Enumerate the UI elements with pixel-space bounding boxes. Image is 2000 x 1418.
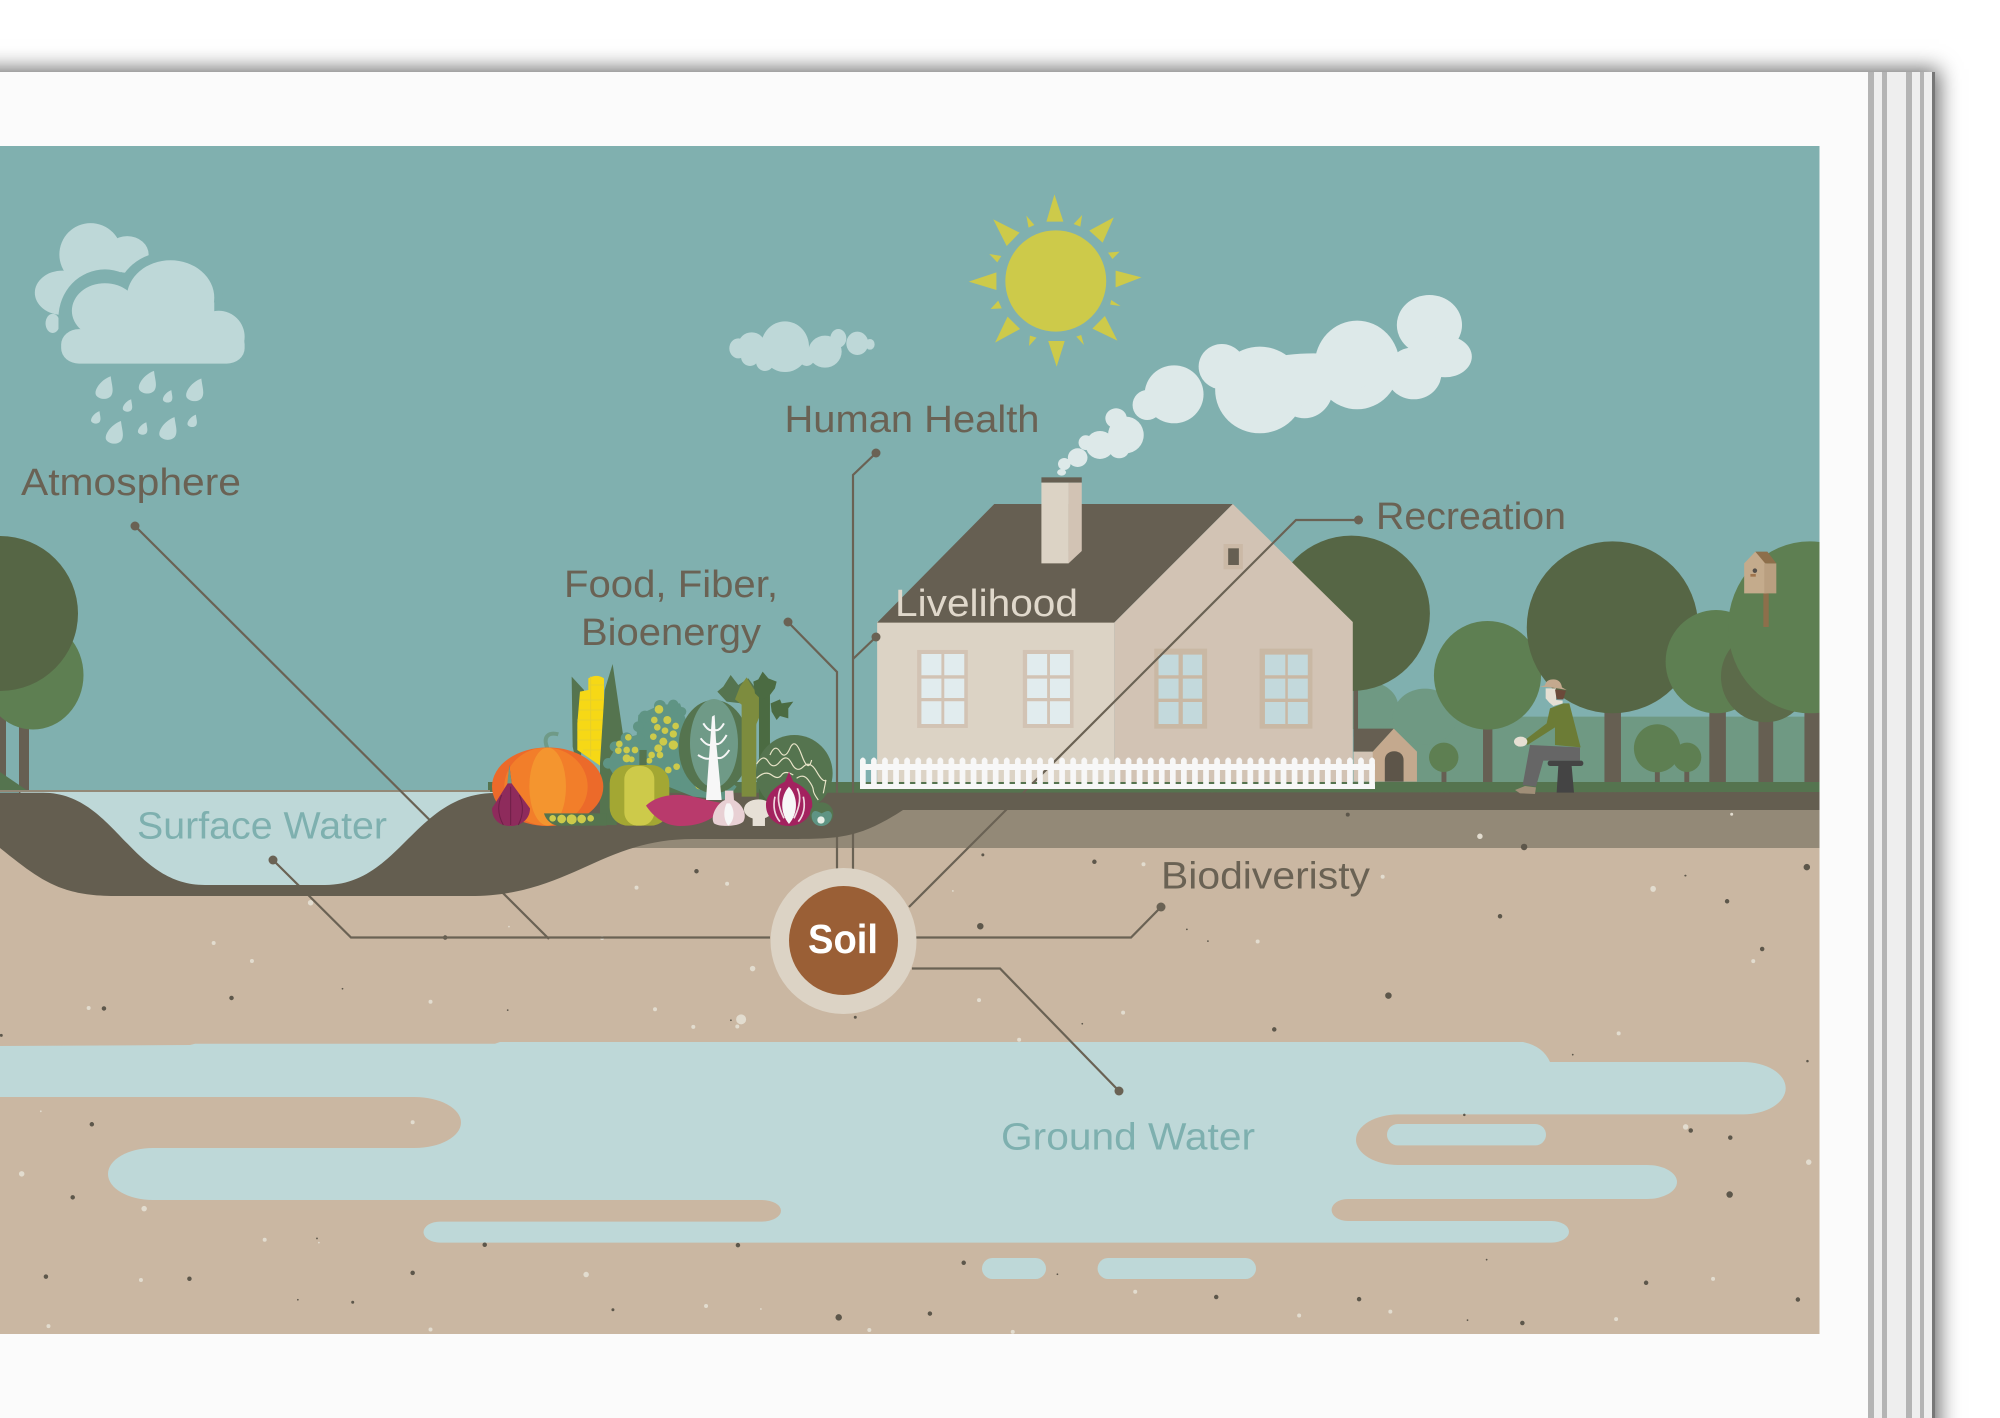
connector lines from soil to each label xyxy=(135,453,1358,1091)
label: Atmosphere: Atmosphere xyxy=(21,462,241,504)
illustration scene xyxy=(0,146,1891,1334)
mushroom xyxy=(744,799,769,826)
icon: rain cloud xyxy=(35,223,245,444)
label: Food, Fiber, Bioenergy: Food, Fiber, xyxy=(564,564,778,606)
celery xyxy=(717,672,793,800)
connector end dots xyxy=(130,448,1363,1096)
icon: chimney smoke xyxy=(1057,295,1472,476)
icon: small cloud xyxy=(729,321,875,372)
label: Human Health: Human Health xyxy=(784,399,1040,441)
corn xyxy=(572,664,623,825)
white picket fence xyxy=(860,757,1375,789)
left trees xyxy=(0,536,84,794)
label: Ground Water: Ground Water xyxy=(1001,1116,1255,1158)
soil hub circle xyxy=(770,868,916,1014)
label: Food, Fiber, Bioenergy xyxy=(564,564,778,654)
cabbage xyxy=(756,735,833,812)
label: Food, Fiber, Bioenergy: Bioenergy xyxy=(581,612,761,654)
soil layer xyxy=(0,848,1820,1334)
brussels sprout xyxy=(810,802,833,826)
grass xyxy=(488,782,1820,794)
icon: birdhouse xyxy=(1744,552,1776,627)
pumpkin xyxy=(492,734,603,826)
windows xyxy=(917,649,1312,729)
garlic xyxy=(713,791,745,826)
bell pepper xyxy=(610,750,669,826)
chard xyxy=(678,699,742,800)
dark topsoil terrain xyxy=(0,792,1820,896)
label: Livelihood: Livelihood xyxy=(895,583,1078,625)
seated man on stool xyxy=(1514,679,1583,794)
ground water xyxy=(0,1042,1786,1279)
purple onion xyxy=(492,765,530,826)
attic vent xyxy=(1224,544,1243,569)
house xyxy=(877,477,1353,788)
label: Recreation: Recreation xyxy=(1376,496,1566,538)
label: Surface Water: Surface Water xyxy=(137,806,387,848)
soil hub circle: Soil xyxy=(808,916,878,962)
chimney xyxy=(1041,477,1082,563)
vegetables: food, fiber, bioenergy xyxy=(492,664,833,826)
pea pod xyxy=(544,813,607,826)
label: Biodiveristy: Biodiveristy xyxy=(1161,856,1370,898)
page edge stripes xyxy=(1868,72,1935,1418)
subsoil layer xyxy=(630,810,1820,848)
sky xyxy=(0,146,1820,846)
sweet potato xyxy=(646,795,725,826)
red onion xyxy=(766,772,812,826)
icon: doghouse xyxy=(1354,729,1417,782)
soil speckles xyxy=(1,814,1809,1332)
mustard greens xyxy=(603,700,737,800)
surface water pond xyxy=(20,792,495,890)
icon: sun xyxy=(969,194,1141,367)
trees behind the house and along the right side xyxy=(1292,536,1820,782)
